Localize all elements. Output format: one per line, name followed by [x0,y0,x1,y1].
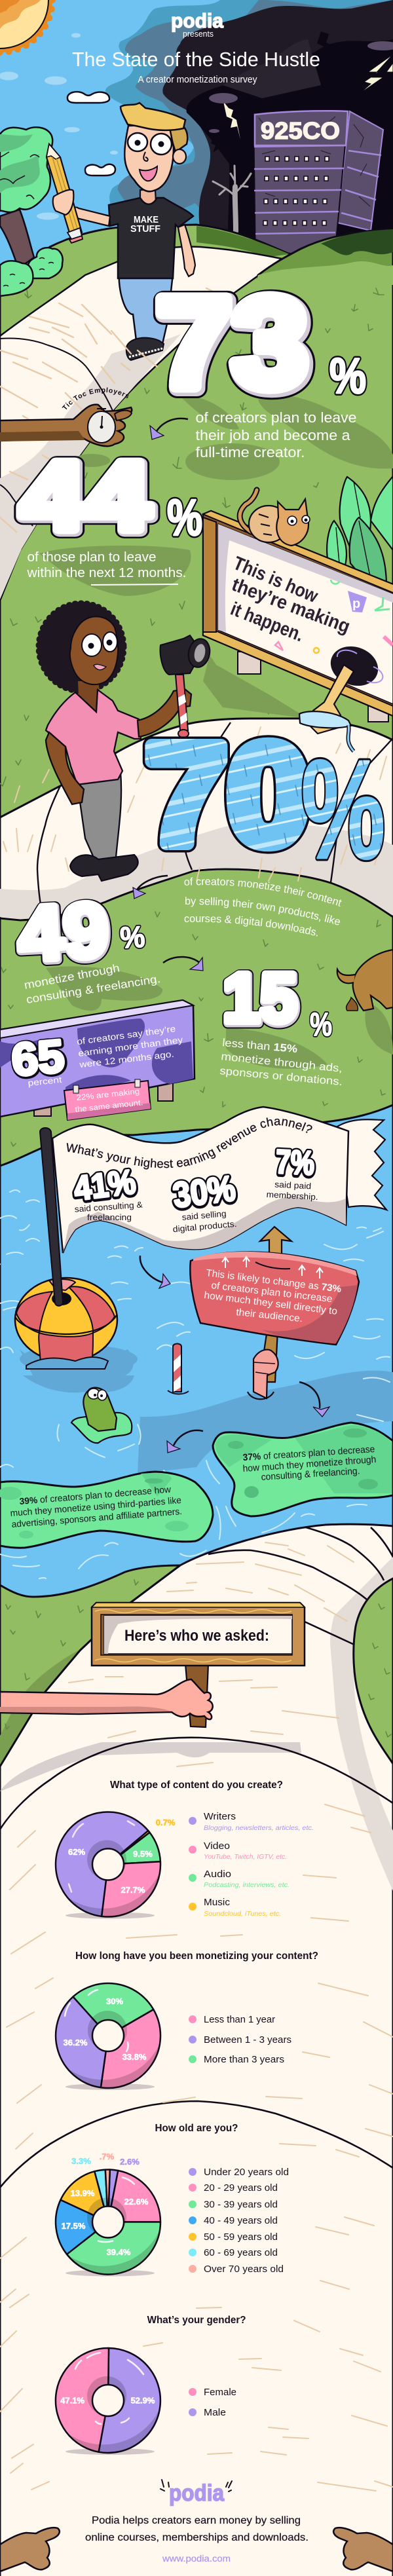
chart values: gender: 47.1% [60,2396,84,2405]
t-shirt [109,198,193,278]
lower left hill [0,1565,180,1766]
caption: 15 percent: sponsors or donations. [219,1065,343,1088]
chart values: content type: 0.7% [156,1818,176,1827]
legend: age: Over 70 years old [204,2264,284,2275]
legend: content type: Writers [204,1812,236,1822]
building sign text: 925CO [261,117,340,144]
purple sign [0,1000,195,1117]
percent word: percent [28,1075,62,1088]
dead tree [213,166,251,231]
arm holding sign [0,1679,213,1719]
sky background [0,0,393,288]
chart values: age: 39.4% [107,2247,131,2257]
eyes [128,133,172,155]
flag [52,1106,350,1254]
flag heading: What’s your highest earning revenue channel? [67,1117,312,1170]
chart values: age: 13.9% [71,2188,95,2198]
hand on pencil [53,190,73,215]
caption: 49 percent: consulting & freelancing. [26,973,161,1006]
billboard panel [218,524,393,704]
sun [0,0,52,52]
billboard heading text: it happen. [227,599,307,646]
cat on billboard [240,490,310,546]
lower right hill [354,1578,393,1764]
neck [140,190,156,205]
portal hole [325,640,384,692]
legend: monetizing duration [189,2015,291,2065]
donut chart: gender [56,2348,160,2455]
billboard heading text: they’re making [229,574,353,637]
chart values: age: .7% [100,2152,115,2161]
green shadows under 73 caption [39,396,393,596]
question: age: How old are you? [155,2123,238,2134]
chart values: gender [60,2396,155,2405]
footer description [85,2515,309,2543]
right island [213,1423,393,1516]
legend: gender: Female [204,2387,236,2398]
arrow: to left island [167,1430,203,1453]
legend: content type: Music [204,1897,230,1908]
bushes [0,248,63,296]
65 percent numeral: 65 [10,1031,67,1086]
red sign text [204,1267,342,1324]
man character [47,103,195,360]
pointing hand left [0,2528,60,2571]
legend: content type: Soundcloud, iTunes, etc. [204,1910,281,1918]
pants and shoe [119,274,173,344]
chart values: content type: 9.5% [133,1849,153,1859]
frog on lily pad [71,1388,132,1443]
woman's pants [77,772,121,868]
7 percent stat: 7% [275,1144,315,1183]
stat: 49 percent: 49 [16,888,111,979]
office building 925CO [253,109,383,262]
stat: 49 percent [16,885,147,979]
lower path shade band [330,1557,393,1891]
flag captions: said consulting & [74,1199,143,1214]
arrow: to stopwatch hand [150,419,188,439]
chart values: monetizing duration: 36.2% [64,2038,88,2047]
red sign text: This is likely to change as 73% [206,1267,342,1295]
path texture strokes upper [0,288,233,532]
water depth shade [20,1349,393,1474]
flag captions [74,1180,318,1234]
billboard heading text [227,553,353,646]
path inner line [0,339,113,526]
legend: age: 50 - 59 years old [204,2232,278,2243]
left island text [10,1484,182,1529]
stat text: 73 percent caption: of creators plan to leave [195,409,356,426]
red sign post [259,1227,291,1382]
stat: 70 percent liquid numerals [145,715,385,888]
sign caption: were 12 months ago. [78,1049,174,1070]
stat: 44 percent: % [167,489,202,546]
flag tail [337,1119,386,1210]
legend: content type: Blogging, newsletters, articles, etc. [204,1824,314,1832]
legend: content type: Podcasting, interviews, etc. [204,1881,290,1889]
stat: 44 percent: % [167,489,202,546]
hair [121,103,185,130]
chart values: gender: 52.9% [131,2396,155,2405]
arm from portal with bottle [299,665,354,751]
who we asked sign post [185,1664,208,1727]
presents label: presents [183,29,214,39]
ear [173,149,186,164]
stat: 49 percent: 49 [16,888,111,979]
curved label: Tic Toc Employers: Tic Toc Employers [62,388,128,410]
woman's pink shirt [46,690,141,785]
buoy [15,1278,138,1373]
footer url: www.podia.com [162,2554,231,2564]
pink note: 22% are making [76,1087,140,1102]
stat: 73 percent: % [329,348,366,404]
legend: gender: Male [204,2408,226,2418]
stat: 15 percent: 15 [223,960,298,1038]
small white arrows on sign [222,1257,323,1279]
30 percent stat: 30% [171,1168,238,1215]
footer sparkle marks [160,2480,232,2492]
caption: 49 percent: monetize through [23,961,121,992]
stat: 70 percent liquid numerals: 70 [145,715,309,874]
camera [160,635,196,675]
pink note [64,1079,151,1120]
chart values: monetizing duration: 33.8% [122,2052,147,2062]
right island text: 37% of creators plan to decrease [242,1444,375,1463]
woman's face [70,616,118,684]
lightning bolts and small storm clouds [209,31,393,153]
chart values: age: 2.6% [120,2157,140,2167]
legend: monetizing duration: More than 3 years [204,2055,284,2065]
caption: 70 percent, curved: by selling their own products, like [185,897,340,925]
legend: content type: Audio [204,1869,231,1880]
legend: age [189,2167,289,2275]
woman character [39,604,212,881]
right hill [255,229,393,285]
billboard heading text: This is how [230,553,321,607]
caption: 70 percent, curved: courses & digital downloads. [185,916,318,937]
7 percent stat: 7% [275,1143,315,1182]
stat: 15 percent: 15 [223,960,298,1038]
caption: 49 percent [23,961,161,1006]
confetti and podia icon: p [352,597,360,611]
woman shadow [203,655,308,719]
confetti and podia icon [275,580,393,653]
legend: age: 30 - 39 years old [204,2199,278,2210]
header logo: podia [171,9,224,32]
winding path upper [0,247,282,601]
stat: 15 percent: % [310,1006,332,1043]
flag pole [40,1128,63,1306]
shadows in lower green [46,966,393,1069]
neck [78,681,100,714]
caption: 70 percent, curved: of creators monetize their content [185,878,342,906]
right island text: how much they monetize through [242,1455,377,1474]
selfie stick [176,675,188,730]
arrow: to red sign [140,1256,170,1288]
chart values: age: 22.6% [124,2197,149,2207]
woman's lips [94,664,106,670]
billboard [203,511,393,716]
right island text [242,1444,377,1483]
left island text: 39% of creators plan to decrease how [19,1484,172,1506]
water [0,1105,393,1598]
donut chart: age [56,2169,160,2277]
flag captions: membership. [266,1189,318,1202]
stat: 73 percent [156,271,366,416]
stat text: 44 percent caption: of those plan to leave [28,550,156,565]
stat: 15 percent [223,958,332,1043]
storm cloud layers [105,0,393,262]
sign caption: of creators say they’re [76,1024,176,1047]
stat: 44 percent: 44 [20,442,150,550]
stat: 49 percent: % [119,920,146,955]
sign caption: earning more than they [77,1035,183,1058]
shirt text: MAKE [134,215,159,225]
question: gender: What’s your gender? [147,2315,246,2326]
chart values: monetizing duration [64,1996,147,2062]
cream hill middle [0,719,393,920]
red sign [190,1252,359,1345]
caption: 15 percent [219,1037,343,1088]
path shaded edge [0,334,181,599]
dark hill shading [196,226,290,257]
background texture strokes on path [0,1542,393,2491]
plant behind billboard [327,476,393,586]
caption: 15 percent: monetize through ads, [221,1051,343,1075]
legend: age: 40 - 49 years old [204,2216,278,2226]
question: content type: What type of content do you create? [110,1780,283,1791]
pink note: the same amount. [75,1098,143,1114]
lower grass tufts [1,912,385,1146]
hand holding post [248,1350,278,1399]
caption: 15 percent: less than 15% [222,1037,298,1055]
sign heading text: Here’s who we asked: [124,1627,269,1645]
footer description: online courses, memberships and downloads. [85,2532,309,2543]
flag captions: freelancing [87,1212,132,1222]
arrow: to right island [299,1382,329,1417]
stat text: 44 percent caption: within the next 12 months. [26,566,186,580]
chart values: content type: 62% [68,1847,85,1857]
stat: 70 percent liquid numerals: 70 [145,715,309,874]
stat text: 73 percent caption: their job and become a [195,427,350,443]
left island [0,1472,213,1548]
legend: gender [189,2387,236,2418]
cream hill shade band [0,824,393,919]
striped post in water [168,1344,189,1394]
legend: monetizing duration: Between 1 - 3 years [204,2035,291,2045]
chart values: content type: 27.7% [121,1885,145,1895]
man's right arm holding pencil [73,207,110,226]
title: The State of the Side Hustle [72,48,320,71]
chart values: content type [68,1818,176,1895]
red sign text: how much they sell directly to [204,1290,338,1317]
lower grass tufts [5,1580,391,1737]
sign caption [76,1024,183,1070]
woman's arms [46,732,84,804]
red sign text: their audience. [236,1307,303,1324]
billboard posts [238,652,388,722]
legend: monetizing duration: Less than 1 year [204,2015,275,2025]
stat: 44 percent: 44 [22,443,151,551]
hair back [167,118,187,152]
41 percent stat: 41% [72,1163,138,1209]
stat: 15 percent: % [310,1006,332,1043]
chart values: age: 17.5% [62,2221,86,2231]
red sign text: of creators plan to increase [211,1280,333,1305]
woman's eyes [82,632,117,656]
man's left arm [178,225,195,276]
purple sign posts [34,1077,173,1116]
face [124,124,174,191]
pencil [47,144,82,237]
flag captions: digital products. [172,1219,237,1234]
flag captions: said paid [274,1180,312,1191]
question: monetizing duration: How long have you been monetizing your content? [75,1951,318,1962]
shade under sign [0,1742,301,1791]
legend: age: 20 - 29 years old [204,2183,278,2193]
arrow: to 49 percent [133,876,168,899]
chart values: monetizing duration: 30% [106,1996,123,2006]
footer description: Podia helps creators earn money by selling [92,2515,301,2526]
water ripple strokes [0,1190,390,1578]
left island text: much they monetize using third-parties like [10,1495,182,1518]
hair [39,604,123,690]
cream hill texture strokes [3,727,386,881]
stat: 73 percent: % [329,348,366,404]
grass tufts upper [0,288,384,786]
pointing hand right [333,2528,393,2571]
stat: 73 percent: 73 [158,273,310,416]
left island text: advertising, sponsors and affiliate partners. [11,1506,182,1529]
woman's shoes [70,855,138,881]
dog and poop [337,950,393,1011]
donut chart: content type [56,1812,160,1919]
41 percent stat: 41% [72,1163,138,1208]
tree [0,127,52,269]
stat: 44 percent: 44 [22,443,151,551]
chart values: age: 3.3% [71,2156,91,2166]
stat: 15 percent: 15 [223,958,297,1037]
stat text: 73 percent caption: full-time creator. [195,444,305,460]
legend: content type: YouTube, Twitch, IGTV, etc. [204,1853,287,1861]
flag captions: said selling [181,1208,227,1222]
stat text: 44 percent caption [26,550,186,585]
cream hill lines [37,722,393,908]
legend: age: 60 - 69 years old [204,2248,278,2258]
legend: content type: Video [204,1841,230,1852]
30 percent stat: 30% [171,1169,238,1216]
legend: age: Under 20 years old [204,2167,289,2178]
legend: content type [189,1812,314,1918]
stat: 73 percent: 73 [158,273,310,416]
stat: 49 percent: 49 [16,887,111,978]
subtitle: A creator monetization survey [138,75,257,85]
who we asked sign [92,1603,305,1666]
hand with stopwatch [0,405,132,446]
65 percent numeral: 65 [10,1030,66,1085]
caption: 70 percent, curved [185,878,342,937]
shirt text: STUFF [130,224,160,234]
stat: 44 percent [20,442,202,551]
shirt text [130,215,160,234]
lower cream path [0,1524,393,2576]
arrow: to 15 percent [163,957,203,971]
footer podia logo: podia [169,2480,224,2506]
right island text: consulting & freelancing. [261,1466,360,1483]
green ground [0,225,393,1179]
clouds [0,33,118,220]
nose and mouth [140,152,157,181]
chart values: age [62,2152,149,2257]
donut chart: monetizing duration [56,1983,160,2090]
stat: 73 percent: 73 [156,271,308,414]
stat text: 73 percent caption [195,409,356,460]
lower path outlines [0,1527,393,2188]
stat: 49 percent: % [119,920,146,955]
building windows [263,157,329,225]
